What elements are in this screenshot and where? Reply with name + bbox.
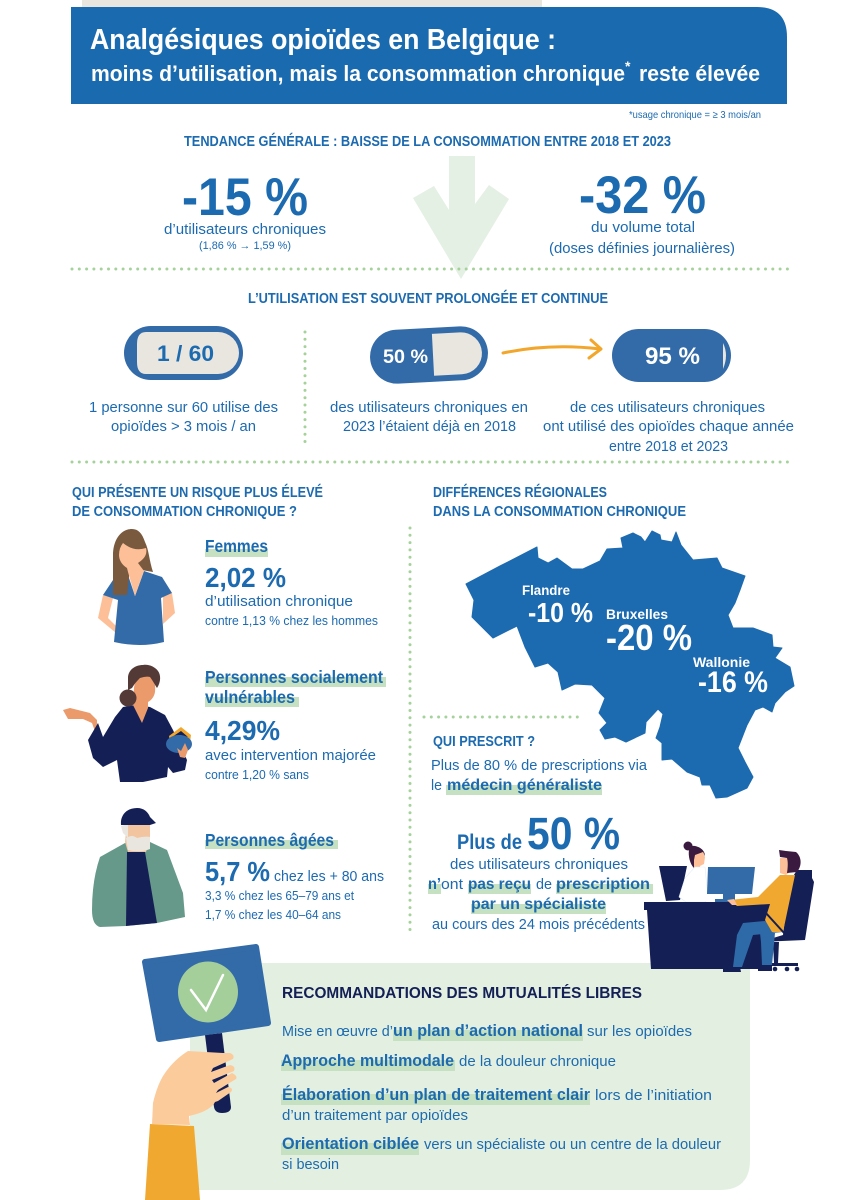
- text: women: 2,02 %: [205, 562, 286, 593]
- text: 50 % already in 2018: des utilisateurs chroniques en: [330, 400, 528, 416]
- recommendation: national plan: sur les opioïdes: [587, 1024, 692, 1040]
- icon: pill 50 %: [369, 325, 489, 385]
- label: Flanders: -10 %: [528, 597, 593, 628]
- recommendation: national plan: [282, 1022, 692, 1041]
- text: more than 50 %: de: [536, 877, 552, 893]
- stat: -32 % total volume: [549, 166, 735, 257]
- text: more than 50 %: pas reçu: [468, 876, 531, 893]
- recommendation: treatment plan: Élaboration d’un plan de traitement clair: [282, 1085, 591, 1104]
- text: who prescribes: médecin généraliste: [447, 777, 602, 794]
- stat: -32 % total volume: -32 %: [579, 166, 706, 225]
- recommendation: treatment plan: d’un traitement par opioïdes: [282, 1108, 468, 1124]
- text: elderly: chez les + 80 ans: [274, 869, 384, 885]
- text: socially vulnerable: 4,29%: [205, 715, 280, 746]
- text: who prescribes: QUI PRESCRIT ?: [433, 734, 535, 750]
- recommendation: treatment plan: lors de l’initiation: [595, 1088, 712, 1104]
- recommendations panel: [190, 963, 750, 1190]
- stat: -15 % chronic users: (1,86 % → 1,59 %): [199, 240, 291, 252]
- stat: -15 % chronic users: -15 %: [182, 168, 308, 227]
- text: more than 50 %: n’: [428, 876, 441, 893]
- illustration: doctor and patient at desk: [644, 842, 814, 972]
- text: more than 50 %: Plus de: [457, 831, 522, 854]
- text: women: contre 1,13 % chez les hommes: [205, 614, 378, 628]
- text: socially vulnerable: avec intervention majorée: [205, 748, 376, 764]
- text: who prescribes: Plus de 80 % de prescriptions via: [431, 758, 648, 774]
- text: women: d’utilisation chronique: [205, 594, 353, 610]
- subtitle: moins d’utilisation, mais la consommation chronique: [91, 61, 625, 86]
- recommendation: targeted referral: Orientation ciblée: [282, 1135, 419, 1153]
- text: elderly: 5,7 %: [205, 856, 270, 887]
- text: 95 % every year: entre 2018 et 2023: [609, 439, 728, 455]
- recommendations heading: RECOMMANDATIONS DES MUTUALITÉS LIBRES: [282, 983, 642, 1002]
- icon: pill 1 / 60: [124, 326, 243, 380]
- text: elderly: 1,7 % chez les 40–64 ans: [205, 908, 341, 922]
- stat: -32 % total volume: (doses définies journalières): [549, 241, 735, 257]
- stat: -15 % chronic users: d’utilisateurs chroniques: [164, 222, 326, 238]
- recommendation: targeted referral: si besoin: [282, 1157, 339, 1173]
- text: more than 50 %: par un spécialiste: [471, 896, 606, 913]
- text: more than 50 %: 50 %: [527, 808, 620, 859]
- recommendation: targeted referral: vers un spécialiste ou un centre de la douleur: [424, 1137, 721, 1153]
- recommendation: national plan: un plan d’action national: [393, 1022, 583, 1040]
- illustration: hand holding check sign: [145, 947, 268, 1200]
- illustration: woman: [98, 529, 175, 645]
- text: more than 50 %: [428, 808, 653, 933]
- text: 1 person in 60: 1 personne sur 60 utilise des: [89, 400, 278, 416]
- text: who prescribes: [431, 734, 648, 795]
- label: Flanders: [522, 582, 593, 628]
- label: Brussels: Bruxelles: [606, 606, 668, 622]
- heading: regional differences: DANS LA CONSOMMATION CHRONIQUE: [433, 504, 686, 520]
- label: Wallonia: -16 %: [698, 666, 768, 699]
- heading: higher risk: [72, 484, 323, 520]
- text: more than 50 %: ont: [441, 877, 463, 893]
- recommendation: multimodal approach: de la douleur chronique: [459, 1054, 616, 1070]
- label: Flanders: Flandre: [522, 582, 570, 598]
- text: 1 person in 60: opioïdes > 3 mois / an: [111, 419, 256, 435]
- heading: higher risk: QUI PRÉSENTE UN RISQUE PLUS ÉLEVÉ: [72, 484, 323, 501]
- text: who prescribes: le: [431, 778, 442, 794]
- text: more than 50 %: des utilisateurs chroniques: [450, 857, 628, 873]
- illustration: socially vulnerable person: [63, 665, 192, 782]
- text: socially vulnerable: vulnérables: [205, 687, 295, 707]
- heading: regional differences: DIFFÉRENCES RÉGIONALES: [433, 484, 607, 501]
- map: Belgium with regional figures: [466, 531, 794, 798]
- header banner: [71, 7, 787, 104]
- text: socially vulnerable: contre 1,20 % sans: [205, 768, 309, 782]
- icon: pill 1 / 60: 1 / 60: [157, 341, 214, 366]
- text: elderly: 3,3 % chez les 65–79 ans et: [205, 889, 354, 903]
- recommendation: targeted referral: [281, 1135, 721, 1173]
- heading: general trend: TENDANCE GÉNÉRALE : BAISSE DE LA CONSOMMATION ENTRE 2018 ET 2023: [184, 133, 671, 150]
- icon: pill 95 %: [612, 329, 731, 382]
- text: 1 person in 60: [89, 400, 278, 435]
- heading: regional differences: [433, 484, 686, 520]
- text: 95 % every year: [543, 400, 794, 455]
- recommendation: national plan: Mise en œuvre d’: [282, 1024, 393, 1040]
- text: 95 % every year: de ces utilisateurs chroniques: [570, 400, 765, 416]
- recommendation: multimodal approach: [281, 1052, 616, 1071]
- heading: prolonged use: L’UTILISATION EST SOUVENT PROLONGÉE ET CONTINUE: [248, 290, 608, 307]
- footnote: *usage chronique = ≥ 3 mois/an: [629, 109, 761, 121]
- title: Analgésiques opioïdes en Belgique :: [90, 24, 556, 56]
- label: Wallonia: [693, 654, 768, 699]
- text: socially vulnerable: [205, 667, 386, 782]
- illustration: elderly person: [92, 808, 185, 927]
- text: elderly: [205, 830, 384, 922]
- stat: -32 % total volume: du volume total: [591, 220, 695, 236]
- text: 50 % already in 2018: 2023 l’étaient déjà en 2018: [343, 419, 516, 435]
- icon: pill 95 %: 95 %: [645, 343, 700, 370]
- text: 95 % every year: ont utilisé des opioïdes chaque année: [543, 419, 794, 435]
- heading: higher risk: DE CONSOMMATION CHRONIQUE ?: [72, 504, 297, 520]
- recommendation: multimodal approach: Approche multimodale: [281, 1052, 454, 1070]
- icon: large down arrow: [413, 156, 509, 279]
- subtitle: *: [625, 58, 631, 74]
- text: more than 50 %: au cours des 24 mois précédents: [432, 917, 645, 933]
- text: more than 50 %: prescription: [556, 876, 650, 893]
- stat: -15 % chronic users: [164, 168, 326, 252]
- text: socially vulnerable: Personnes socialement: [205, 667, 383, 687]
- label: Wallonia: Wallonie: [693, 654, 750, 670]
- text: elderly: Personnes âgées: [205, 830, 334, 850]
- subtitle: reste élevée: [639, 61, 760, 86]
- text: women: Femmes: [205, 536, 268, 556]
- text: women: [205, 536, 378, 628]
- arrow: orange: [503, 340, 601, 358]
- label: Brussels: -20 %: [606, 617, 692, 658]
- icon: pill 50 %: 50 %: [383, 347, 428, 368]
- recommendation: treatment plan: [281, 1085, 712, 1124]
- text: 50 % already in 2018: [330, 400, 528, 435]
